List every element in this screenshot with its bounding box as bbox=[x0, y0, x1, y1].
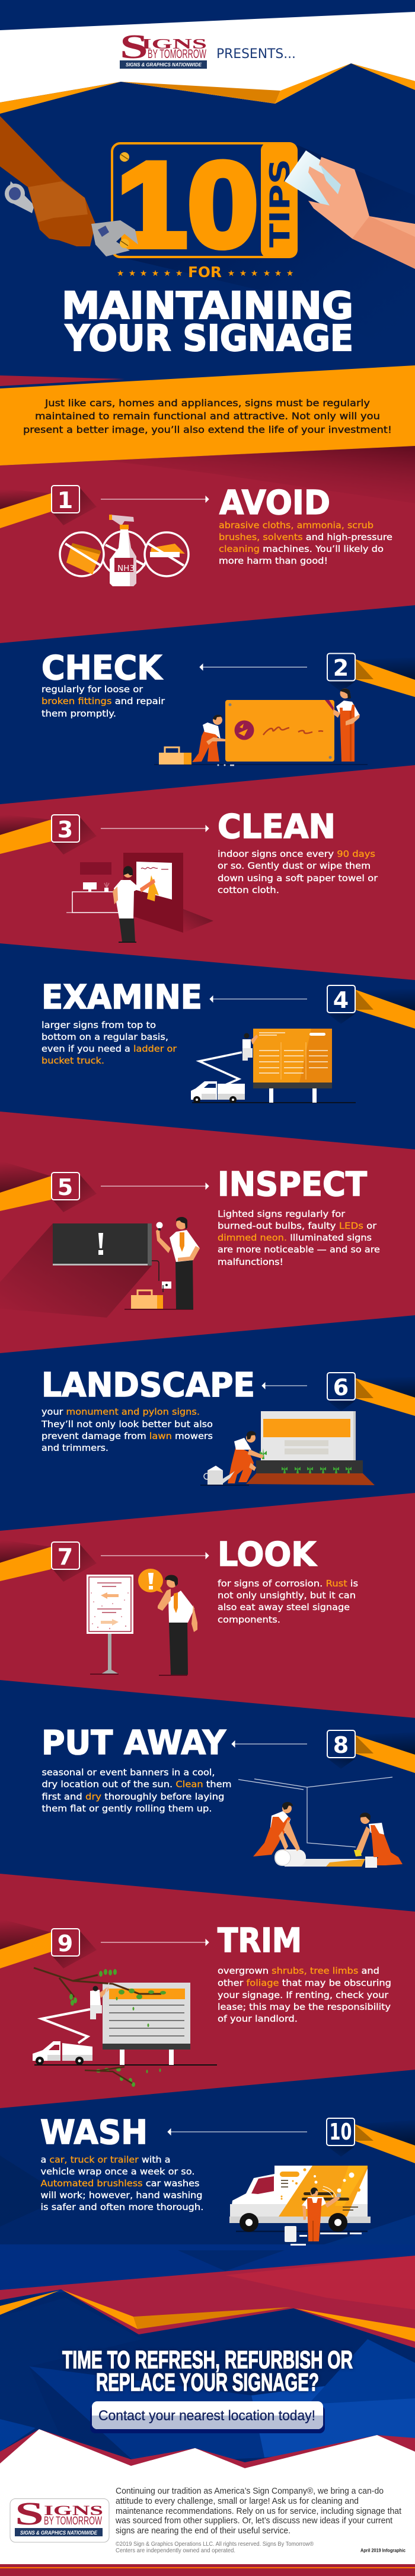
body 5: burned-out bulbs, faulty LEDs or bbox=[218, 1220, 377, 1231]
illustration: workers rolling banner bbox=[238, 1777, 403, 1868]
tip 6 panel bbox=[41, 1366, 415, 1485]
footer white area bbox=[0, 2429, 415, 2576]
background: header white band bbox=[0, 12, 415, 104]
closing headline bbox=[62, 2346, 353, 2396]
body 4: bottom on a regular basis, bbox=[42, 1032, 168, 1042]
number 6: 6 bbox=[333, 1374, 349, 1401]
logo: footer: SIGNS & GRAPHICS NATIONWIDE bbox=[20, 2530, 98, 2536]
number 8 bbox=[327, 1730, 355, 1758]
illustration: man cleaning indoor sign bbox=[66, 853, 213, 943]
copyright: Centers are independently owned and operated. bbox=[116, 2547, 235, 2554]
body 3 bbox=[218, 849, 378, 895]
number 9 bbox=[52, 1929, 79, 1957]
body 5: are more noticeable — and so are bbox=[218, 1244, 380, 1255]
badge: 10 tips: 10 bbox=[116, 137, 258, 272]
heading look: LOOK bbox=[218, 1536, 318, 1574]
ribbon 3 bbox=[0, 814, 97, 855]
tip 8 panel bbox=[42, 1724, 415, 1868]
illustration: corroded sign and man bbox=[87, 1569, 197, 1675]
background: crimson band tip 9 bbox=[0, 1874, 415, 2108]
body 6: prevent damage from lawn mowers bbox=[42, 1431, 213, 1441]
logo: Signs By Tomorrow header: BY TOMORROW bbox=[148, 47, 206, 61]
body 10: a car, truck or trailer with a bbox=[40, 2154, 171, 2165]
number 5: 5 bbox=[58, 1174, 73, 1200]
body 4: even if you need a ladder or bbox=[42, 1043, 177, 1054]
number 5 bbox=[52, 1173, 79, 1200]
intro text: Just like cars, homes and appliances, signs must be regularly bbox=[44, 397, 370, 409]
arrow 2 bbox=[200, 664, 307, 670]
icon: arm with wrench bbox=[0, 116, 138, 256]
closing banner shapes bbox=[0, 2256, 415, 2348]
background: crimson band tip 5 bbox=[0, 1112, 415, 1353]
body 7: also eat away steel signage bbox=[218, 1602, 350, 1613]
arrow 1 bbox=[101, 496, 209, 502]
body 6: your monument and pylon signs. bbox=[42, 1406, 200, 1417]
arrow 4 bbox=[210, 996, 307, 1002]
number 2: 2 bbox=[333, 655, 349, 681]
logo: Signs By Tomorrow header bbox=[120, 27, 207, 69]
logo: Signs By Tomorrow header: SIGNS & GRAPHICS NATIONWIDE bbox=[126, 62, 202, 68]
ribbon 1 bbox=[0, 487, 97, 528]
tip 9 panel bbox=[0, 1919, 391, 2087]
body 8 bbox=[42, 1767, 231, 1814]
background: crimson band tip 1 bbox=[0, 446, 415, 643]
body 6: and trimmers. bbox=[42, 1443, 108, 1453]
text: for with stars: FOR bbox=[188, 264, 222, 281]
ribbon 4 bbox=[328, 989, 415, 1029]
intro band bbox=[0, 365, 415, 465]
logo: Signs By Tomorrow header: S bbox=[120, 27, 148, 66]
body 9: your signage. If renting, check your bbox=[218, 1990, 389, 2000]
tip 2 panel bbox=[42, 649, 415, 766]
title: YOUR SIGNAGE bbox=[65, 317, 353, 359]
illustration: bucket truck and billboard bbox=[191, 1029, 356, 1103]
number 7 bbox=[52, 1542, 79, 1570]
body 9: overgrown shrubs, tree limbs and bbox=[218, 1965, 379, 1976]
body 10: vehicle wrap once a week or so. bbox=[40, 2166, 194, 2177]
call to action button: Contact your nearest location today! bbox=[98, 2408, 315, 2424]
number 10: 10 bbox=[330, 2119, 352, 2145]
body 2: regularly for loose or bbox=[42, 684, 143, 695]
body 8: first and dry thoroughly before laying bbox=[42, 1791, 224, 1802]
body 5: dimmed neon. Illuminated signs bbox=[218, 1232, 372, 1243]
heading landscape: LANDSCAPE bbox=[42, 1366, 255, 1405]
number 6 bbox=[327, 1373, 355, 1401]
body 6 bbox=[41, 1406, 213, 1453]
body 4: bucket truck. bbox=[42, 1055, 104, 1066]
illustration: trimming branches at billboard bbox=[33, 1968, 217, 2087]
body 1: cleaning machines. You’ll likely do bbox=[219, 544, 384, 554]
number 1: 1 bbox=[58, 487, 73, 513]
body 7 bbox=[218, 1578, 358, 1625]
body 7: components. bbox=[218, 1614, 280, 1625]
footer text: attitude to every challenge, small or large! Ask us for cleaning and bbox=[116, 2496, 359, 2506]
logo: footer: S bbox=[15, 2495, 44, 2532]
text: for with stars: ★★★★★★★★★★★★ bbox=[117, 269, 293, 278]
body 3: cotton cloth. bbox=[218, 885, 279, 895]
title: MAINTAINING bbox=[62, 284, 353, 327]
body 3: down using a soft paper towel or bbox=[218, 873, 378, 884]
body 7: for signs of corrosion. Rust is bbox=[218, 1578, 358, 1589]
body 10 bbox=[40, 2154, 204, 2212]
heading wash: WASH bbox=[40, 2114, 148, 2152]
number 7: 7 bbox=[58, 1544, 73, 1570]
background: crimson band tip 7 bbox=[0, 1493, 415, 1718]
tip 10 panel bbox=[40, 2114, 415, 2246]
date note: April 2019 Infographic bbox=[360, 2548, 406, 2553]
number 3: 3 bbox=[58, 817, 73, 843]
ribbon 9 bbox=[0, 1919, 97, 1968]
call to action button bbox=[90, 2401, 325, 2433]
icon: banned items and spray bottle: NH3 bbox=[117, 564, 135, 573]
background: closing blue facets bbox=[0, 2156, 415, 2463]
body 1: more harm than good! bbox=[219, 555, 328, 566]
ribbon 7 bbox=[0, 1540, 97, 1582]
ribbon 5 bbox=[0, 1161, 97, 1212]
intro text: maintained to remain functional and attractive. Not only will you bbox=[35, 410, 380, 422]
heading avoid: AVOID bbox=[219, 484, 330, 522]
arrow 8 bbox=[232, 1741, 307, 1747]
body 8: seasonal or event banners in a cool, bbox=[42, 1767, 215, 1778]
body 3: indoor signs once every 90 days bbox=[218, 849, 375, 859]
text: presents: PRESENTS... bbox=[216, 47, 296, 62]
body 5: Lighted signs regularly for bbox=[218, 1209, 346, 1219]
background: crimson band tip 3 bbox=[0, 765, 415, 980]
illustration: workers repairing sign bbox=[154, 688, 368, 766]
tip 4 panel bbox=[42, 978, 415, 1103]
copyright: ©2019 Sign & Graphics Operations LLC. All rights reserved. Signs By Tomorrow® bbox=[116, 2540, 314, 2548]
background: shaded corner tip 1 bbox=[107, 446, 415, 503]
heading clean: CLEAN bbox=[218, 808, 336, 846]
number 8: 8 bbox=[333, 1732, 349, 1758]
body 2: them promptly. bbox=[42, 708, 116, 719]
arrow 7 bbox=[101, 1553, 209, 1559]
number 2 bbox=[327, 654, 355, 681]
heading trim: TRIM bbox=[218, 1922, 302, 1960]
logo: footer: IGNS bbox=[44, 2503, 103, 2518]
footer text: Continuing our tradition as America’s Sign Company®, we bring a can-do bbox=[116, 2486, 384, 2496]
icon: banned items and spray bottle bbox=[60, 515, 189, 586]
logo: footer: BY TOMORROW bbox=[44, 2515, 102, 2527]
ribbon 6 bbox=[328, 1377, 415, 1416]
arrow 5 bbox=[101, 1183, 209, 1189]
footer text: signs are nearing the end of their useful service. bbox=[116, 2526, 290, 2536]
number 3 bbox=[52, 815, 79, 843]
logo: Signs By Tomorrow header: IGNS bbox=[141, 37, 207, 52]
heading put away: PUT AWAY bbox=[42, 1724, 226, 1762]
body 8: them flat or gently rolling them up. bbox=[42, 1803, 212, 1814]
ribbon 10 bbox=[328, 2120, 415, 2163]
copyright bbox=[116, 2540, 314, 2554]
logo: footer bbox=[10, 2495, 109, 2542]
tip 7 panel bbox=[0, 1536, 358, 1675]
background: header orange accents bbox=[0, 63, 415, 114]
body 9: lease; this may be the responsibility bbox=[218, 2002, 391, 2012]
text: for with stars bbox=[117, 264, 293, 281]
ribbon 2 bbox=[328, 657, 415, 697]
body 5: malfunctions! bbox=[218, 1257, 283, 1267]
ribbon 8 bbox=[328, 1732, 415, 1773]
body 1: abrasive cloths, ammonia, scrub bbox=[219, 520, 374, 531]
body 2 bbox=[42, 684, 165, 719]
body 6: They’ll not only look better but also bbox=[41, 1419, 213, 1430]
number 4 bbox=[327, 985, 355, 1013]
footer text: was sourced from other suppliers. Or, let’s discuss new ideas if your current bbox=[115, 2516, 393, 2526]
arrow 10 bbox=[168, 2129, 307, 2135]
body 10: will work; however, hand washing bbox=[40, 2190, 203, 2201]
body 1 bbox=[219, 520, 392, 566]
heading inspect: INSPECT bbox=[218, 1165, 367, 1204]
body 2: broken fittings and repair bbox=[42, 696, 165, 706]
body 1: brushes, solvents and high-pressure bbox=[219, 532, 392, 542]
body 4: larger signs from top to bbox=[42, 1020, 156, 1030]
tip 1 panel bbox=[0, 484, 392, 586]
arrow 6 bbox=[262, 1383, 307, 1389]
body 5 bbox=[218, 1209, 380, 1267]
intro text: present a better image, you’ll also extend the life of your investment! bbox=[23, 424, 392, 435]
number 9: 9 bbox=[58, 1931, 73, 1957]
footer text: maintenance recommendations. Rely on us for service, including signage that bbox=[116, 2506, 402, 2516]
icon: hand with sponge bbox=[285, 150, 415, 269]
illustration: washing wrapped van bbox=[229, 2166, 371, 2246]
body 10: is safer and often more thorough. bbox=[40, 2202, 204, 2212]
body 9: of your landlord. bbox=[218, 2013, 298, 2024]
body 8: dry location out of the sun. Clean them bbox=[42, 1779, 231, 1790]
body 3: or so. Gently dust or wipe them bbox=[218, 860, 371, 871]
body 7: not only unsightly, but it can bbox=[218, 1590, 356, 1601]
body 9: other foliage that may be obscuring bbox=[218, 1978, 391, 1989]
body 10: Automated brushless car washes bbox=[40, 2178, 199, 2189]
number 4: 4 bbox=[333, 987, 349, 1013]
illustration: monument sign and gardener bbox=[200, 1411, 375, 1485]
badge: 10 tips: TIPS bbox=[264, 159, 296, 248]
illustration: dark sign and man with bulb bbox=[0, 1217, 200, 1318]
heading check: CHECK bbox=[42, 649, 164, 688]
heading examine: EXAMINE bbox=[42, 978, 202, 1017]
tip 5 panel bbox=[0, 1161, 380, 1318]
arrow 3 bbox=[101, 826, 209, 831]
body 9 bbox=[218, 1965, 391, 2024]
tip 3 panel bbox=[0, 808, 378, 943]
shadow: badge streak bbox=[124, 145, 415, 361]
intro text bbox=[23, 397, 392, 435]
number 1 bbox=[52, 486, 79, 513]
title bbox=[62, 284, 353, 359]
arrow 9 bbox=[101, 1939, 209, 1945]
body 4 bbox=[42, 1020, 177, 1066]
footer text bbox=[115, 2486, 402, 2536]
footer stripes bbox=[0, 2564, 415, 2576]
